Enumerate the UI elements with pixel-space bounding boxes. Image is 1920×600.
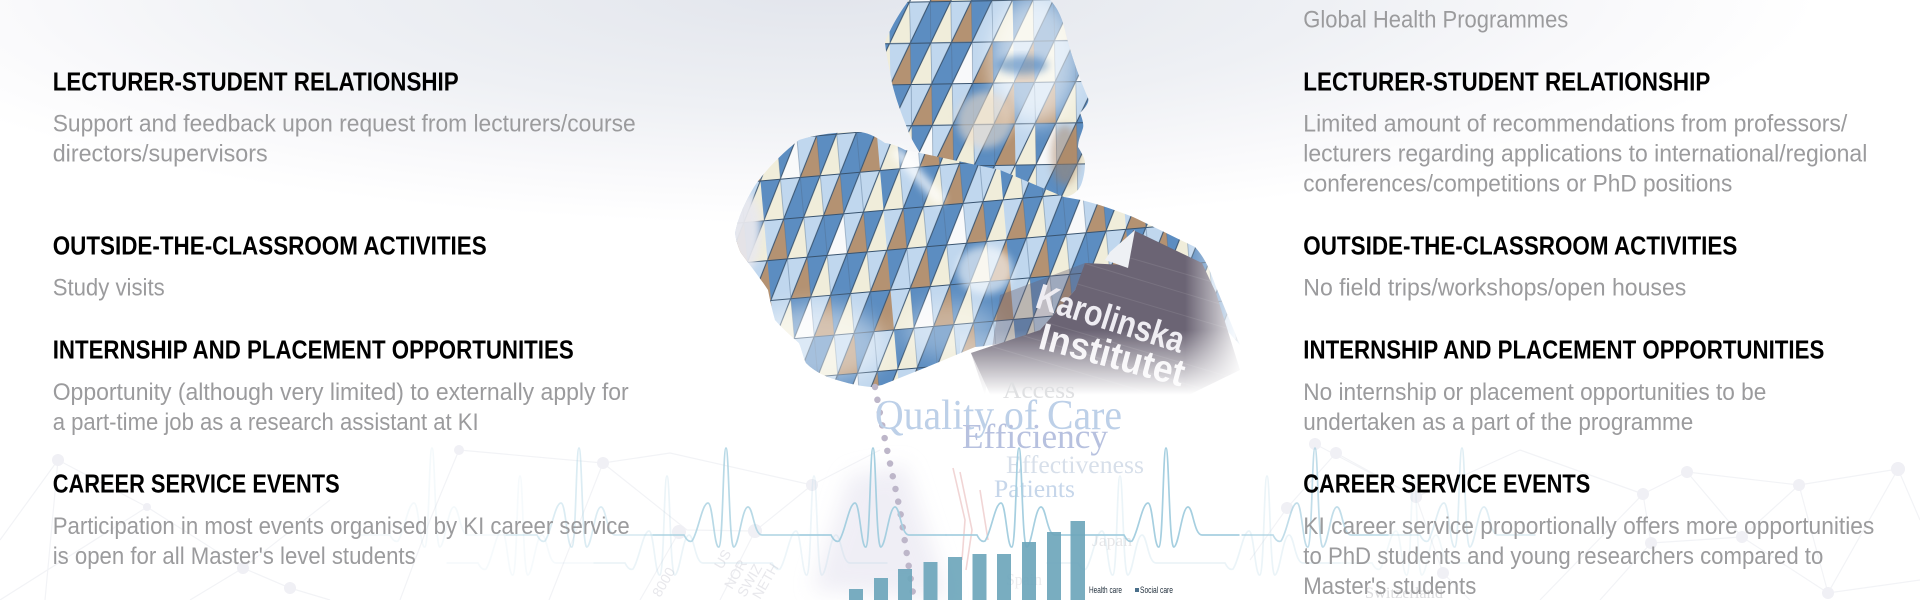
building wall xyxy=(971,230,1238,392)
word cloud: Access xyxy=(1003,378,1075,404)
chart legend xyxy=(1089,585,1173,595)
word cloud: Efficiency xyxy=(962,417,1108,456)
network pattern background xyxy=(0,438,1920,600)
bar chart xyxy=(849,521,1085,600)
faint rotated chart labels: SWIZ xyxy=(734,561,765,600)
left: career service events: CAREER SERVICE EVENTS xyxy=(53,469,340,499)
bottom and right fade xyxy=(960,330,1260,410)
right: internship and placement opportunities: INTERNSHIP AND PLACEMENT OPPORTUNITIES xyxy=(1303,335,1824,365)
left column text panel xyxy=(53,67,636,570)
right column text panel xyxy=(1303,6,1874,600)
right: internship and placement opportunities xyxy=(1303,335,1824,436)
left: outside-the-classroom activities xyxy=(53,230,487,302)
stethoscope coloured lines xyxy=(953,468,988,570)
right: outside-the-classroom activities xyxy=(1303,230,1737,302)
left: lecturer-student relationship xyxy=(53,67,636,168)
right: career service events: KI career service proportionally offers more opportunities xyxy=(1303,513,1874,540)
faint rotated chart labels: NOR xyxy=(721,557,750,592)
word cloud: Effectiveness xyxy=(1006,452,1144,479)
right: career service events xyxy=(1303,469,1874,600)
word cloud: Patients xyxy=(994,476,1075,503)
right: career service events: to PhD students and young researchers compared to xyxy=(1303,543,1823,570)
left: internship and placement opportunities: Opportunity (although very limited) to externally apply for xyxy=(53,379,629,406)
diagonal light band between heads xyxy=(895,150,942,202)
left: lecturer-student relationship: LECTURER-STUDENT RELATIONSHIP xyxy=(53,67,459,97)
sign: Karolinska Institutet: Karolinska xyxy=(1032,276,1191,361)
right: lecturer-student relationship: Limited amount of recommendations from professors/ xyxy=(1303,111,1848,138)
chart legend: Social care xyxy=(1140,585,1173,595)
left: career service events: Participation in most events organised by KI career service xyxy=(53,513,630,540)
right: partial line at top: Global Health Programmes xyxy=(1303,6,1568,33)
word cloud: Quality of Care xyxy=(875,393,1122,439)
left: outside-the-classroom activities: OUTSIDE-THE-CLASSROOM ACTIVITIES xyxy=(53,230,487,260)
man's head with facade xyxy=(880,0,1090,205)
left: internship and placement opportunities: INTERNSHIP AND PLACEMENT OPPORTUNITIES xyxy=(53,335,574,365)
word cloud xyxy=(875,378,1443,600)
woman's neck and shoulder haze xyxy=(812,465,950,600)
right: lecturer-student relationship: LECTURER-STUDENT RELATIONSHIP xyxy=(1303,67,1710,97)
right: internship and placement opportunities: undertaken as a part of the programme xyxy=(1303,409,1693,436)
left: internship and placement opportunities xyxy=(53,335,629,436)
right: lecturer-student relationship xyxy=(1303,67,1867,198)
left: lecturer-student relationship: Support and feedback upon request from lecturers/course xyxy=(53,111,636,138)
word cloud: Japan xyxy=(1092,531,1133,550)
woman's head and shoulders with facade xyxy=(729,125,1245,395)
right: career service events: Master's students xyxy=(1303,573,1476,600)
right: internship and placement opportunities: No internship or placement opportunities to be xyxy=(1303,379,1766,406)
bead chain stethoscope xyxy=(875,387,914,600)
ECG lines xyxy=(358,448,1536,575)
chart legend: Health care xyxy=(1089,585,1122,595)
double-exposure collage: heads and building xyxy=(735,0,1240,392)
right: career service events: CAREER SERVICE EVENTS xyxy=(1303,469,1590,499)
faint rotated chart labels xyxy=(649,547,782,600)
left: lecturer-student relationship: directors/supervisors xyxy=(53,141,268,168)
faint rotated chart labels: US xyxy=(711,547,734,572)
right: lecturer-student relationship: lecturers regarding applications to international/regional xyxy=(1303,141,1867,168)
left: career service events xyxy=(53,469,630,570)
sign: Karolinska Institutet xyxy=(1032,276,1191,395)
left: outside-the-classroom activities: Study visits xyxy=(53,275,165,302)
wall blended under facade xyxy=(971,263,1085,395)
faint rotated chart labels: 8000 xyxy=(649,564,678,600)
left: career service events: is open for all Master's level students xyxy=(53,543,416,570)
left: internship and placement opportunities: a part-time job as a research assistant at KI xyxy=(53,409,479,436)
right: outside-the-classroom activities: No field trips/workshops/open houses xyxy=(1303,275,1686,302)
sign: Karolinska Institutet: Institutet xyxy=(1035,316,1190,395)
word cloud: Spain xyxy=(1006,570,1042,589)
right: outside-the-classroom activities: OUTSIDE-THE-CLASSROOM ACTIVITIES xyxy=(1303,230,1737,260)
right: lecturer-student relationship: conferences/competitions or PhD positions xyxy=(1303,171,1732,198)
building window xyxy=(1105,230,1135,268)
